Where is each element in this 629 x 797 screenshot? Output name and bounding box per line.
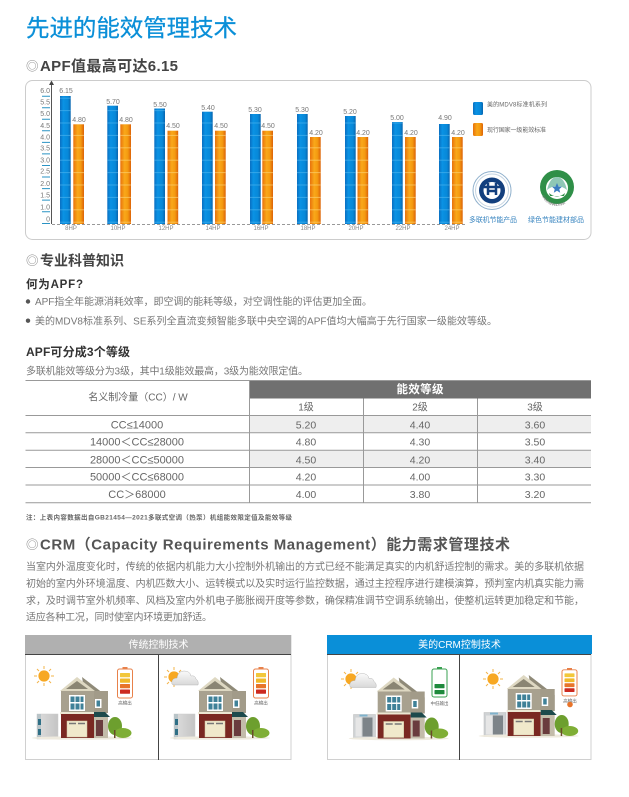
caption: product: 多联机节能产品 <box>469 215 517 224</box>
text: CRM description: 适应各种工况，同时使室内环境更加舒适。 <box>26 610 212 624</box>
bar values: 5.20 <box>343 109 357 116</box>
scene: sunny, high output: 高输出 <box>118 700 132 706</box>
x axis labels: 12HP <box>158 226 174 232</box>
subheading: three grades: APF可分成3个等级 <box>26 344 130 359</box>
table: APF grades: 1级 <box>298 402 314 414</box>
bar values: 4.50 <box>261 123 275 130</box>
table note: 注：上表内容数据出自GB21454—2021多联式空调（热泵）机组能效限定值及能效等级 <box>26 512 292 522</box>
table: APF grades: 28000＜CC≤50000 <box>90 454 184 466</box>
icon: green building badge <box>540 170 574 206</box>
bar values: 5.00 <box>390 115 404 122</box>
heading: CRM: ◎ <box>26 538 39 552</box>
heading: CRM: CRM（Capacity Requirements Management）能力需求管理技术 <box>40 536 510 554</box>
legend: 现行国家一级能效标准 <box>487 126 546 134</box>
y axis: 4.0 <box>40 134 50 142</box>
table: APF grades: 4.80 <box>296 436 316 448</box>
subheading: what is APF: 何为APF? <box>26 277 83 291</box>
icon: energy saving badge <box>473 172 511 210</box>
text: CRM description <box>26 560 584 624</box>
bar values: 5.50 <box>153 102 167 109</box>
text: CRM description: 求，及时调节室外机频率、风档及室内外机电子膨胀阀开度等参数，确保精准调节空调系统输出，使整机运转更加稳定和节能， <box>26 594 584 607</box>
table: APF grades: 3级 <box>527 402 543 414</box>
bar values: 5.70 <box>106 99 120 106</box>
panel: APF bar chart <box>25 80 592 240</box>
scene: cloudy, medium output: 中低输出 <box>430 700 449 707</box>
y axis: 2.0 <box>40 181 50 188</box>
heading: APF: APF值最高可达6.15 <box>40 57 178 75</box>
table: APF grades: 3.20 <box>525 489 545 501</box>
bar values: 4.90 <box>438 115 452 122</box>
y axis <box>40 80 54 224</box>
legend: 美的MDV8标准机系列 <box>487 100 547 108</box>
scene: sunny, high output <box>479 668 579 738</box>
table: APF grades <box>26 380 591 503</box>
y axis: 4.5 <box>40 123 50 130</box>
x axis labels: 18HP <box>300 226 316 232</box>
scene: cloudy, high output <box>164 667 270 740</box>
y axis: 5.5 <box>40 100 50 106</box>
table: APF grades: 4.20 <box>410 454 430 466</box>
y axis: 2.5 <box>40 168 50 176</box>
scene: cloudy, high output: 高输出 <box>254 700 268 706</box>
table: APF grades: 50000＜CC≤68000 <box>90 472 184 484</box>
table: APF grades: 3.50 <box>525 436 545 448</box>
panel: traditional control <box>25 635 291 760</box>
scene: cloudy, medium output <box>341 667 449 740</box>
heading: science: 专业科普知识 <box>40 252 124 268</box>
panel: Midea CRM control <box>327 635 592 760</box>
table: APF grades: CC≤14000 <box>111 420 163 432</box>
table: APF grades: 3.60 <box>525 420 545 432</box>
bar values: 4.80 <box>119 117 133 124</box>
scene: sunny, high output: 高输出 <box>563 698 577 704</box>
x axis labels: 10HP <box>110 226 126 232</box>
table: APF grades: 4.20 <box>296 472 316 484</box>
y axis: 3.5 <box>40 146 50 152</box>
y axis: 5.0 <box>40 111 50 118</box>
title: 先进的能效管理技术 <box>26 15 237 41</box>
table: APF grades: 名义制冷量（CC）/ W <box>88 390 188 404</box>
x axis labels: 20HP <box>348 226 364 232</box>
table: APF grades: 3.30 <box>525 472 545 484</box>
bar values: 4.20 <box>451 130 465 137</box>
heading: APF: ◎ <box>26 60 39 74</box>
text: APF definition: 美的MDV8标准系列、SE系列全直流变频智能多联中央空调的APF值均大幅高于先行国家一级能效等级。 <box>35 314 497 328</box>
text: CRM description: 当室内外温度变化时，传统的依据内机能力大小控制外机输出的方式已经不能满足真实的内机舒适控制的需求。美的多联机依据 <box>26 560 584 573</box>
legend <box>473 100 547 136</box>
table: APF grades: 14000＜CC≤28000 <box>90 436 184 448</box>
bar values: 4.80 <box>72 117 86 124</box>
table: APF grades: 4.00 <box>410 472 430 484</box>
x axis labels <box>65 226 460 232</box>
table: APF grades: CC＞68000 <box>108 489 166 501</box>
table: APF grades: 4.50 <box>296 454 316 466</box>
text: CRM description: 初始的室内外环境温度、内机匹数大小、运转模式以及实时运行监控数据，通过主控程序进行建模演算，预判室内机真实能力需 <box>26 577 584 590</box>
table: APF grades: 能效等级 <box>396 382 444 396</box>
table: APF grades: 4.30 <box>410 436 430 448</box>
bar values: 4.20 <box>356 130 370 137</box>
heading: science: ◎ <box>26 254 39 268</box>
text: APF definition <box>26 295 497 328</box>
bar values: 6.15 <box>59 88 73 95</box>
caption: building: 绿色节能建材部品 <box>528 215 584 224</box>
bar values: 5.30 <box>248 107 262 114</box>
bar values: 4.50 <box>214 123 228 130</box>
table: APF grades: 5.20 <box>296 420 316 432</box>
y axis: 3.0 <box>40 158 50 164</box>
bar values <box>59 88 465 137</box>
y axis: 1.5 <box>40 192 50 200</box>
panel: traditional control: 传统控制技术 <box>128 638 188 651</box>
x axis labels: 16HP <box>253 226 269 232</box>
bar values: 4.50 <box>166 123 180 130</box>
bars <box>60 96 463 224</box>
x axis labels: 14HP <box>205 226 221 232</box>
text: grades intro: 多联机能效等级分为3级，其中1级能效最高，3级为能效限定值。 <box>26 364 308 378</box>
table: APF grades: 4.40 <box>410 420 430 432</box>
y axis: 0 <box>46 216 50 224</box>
scene: sunny, high output <box>32 666 132 740</box>
panel: Midea CRM control: 美的CRM控制技术 <box>418 638 501 651</box>
table: APF grades: 3.80 <box>410 489 430 501</box>
table: APF grades: 3.40 <box>525 454 545 466</box>
bar values: 4.20 <box>309 130 323 137</box>
bar values: 4.20 <box>404 130 418 137</box>
x axis labels: 22HP <box>395 226 411 232</box>
icon: green building badge: GREEN BRAND STAR <box>542 195 566 206</box>
x axis labels: 8HP <box>65 226 77 232</box>
x axis labels: 24HP <box>444 226 460 232</box>
y axis: 1.0 <box>40 204 50 212</box>
text: APF definition: APF指全年能源消耗效率，即空调的能耗等级，对空调性能的评估更加全面。 <box>35 295 372 308</box>
table: APF grades: 2级 <box>412 402 428 414</box>
bar values: 5.30 <box>295 107 309 114</box>
y axis: 6.0 <box>40 88 50 95</box>
table: APF grades: 4.00 <box>296 489 316 501</box>
bar values: 5.40 <box>201 105 215 112</box>
